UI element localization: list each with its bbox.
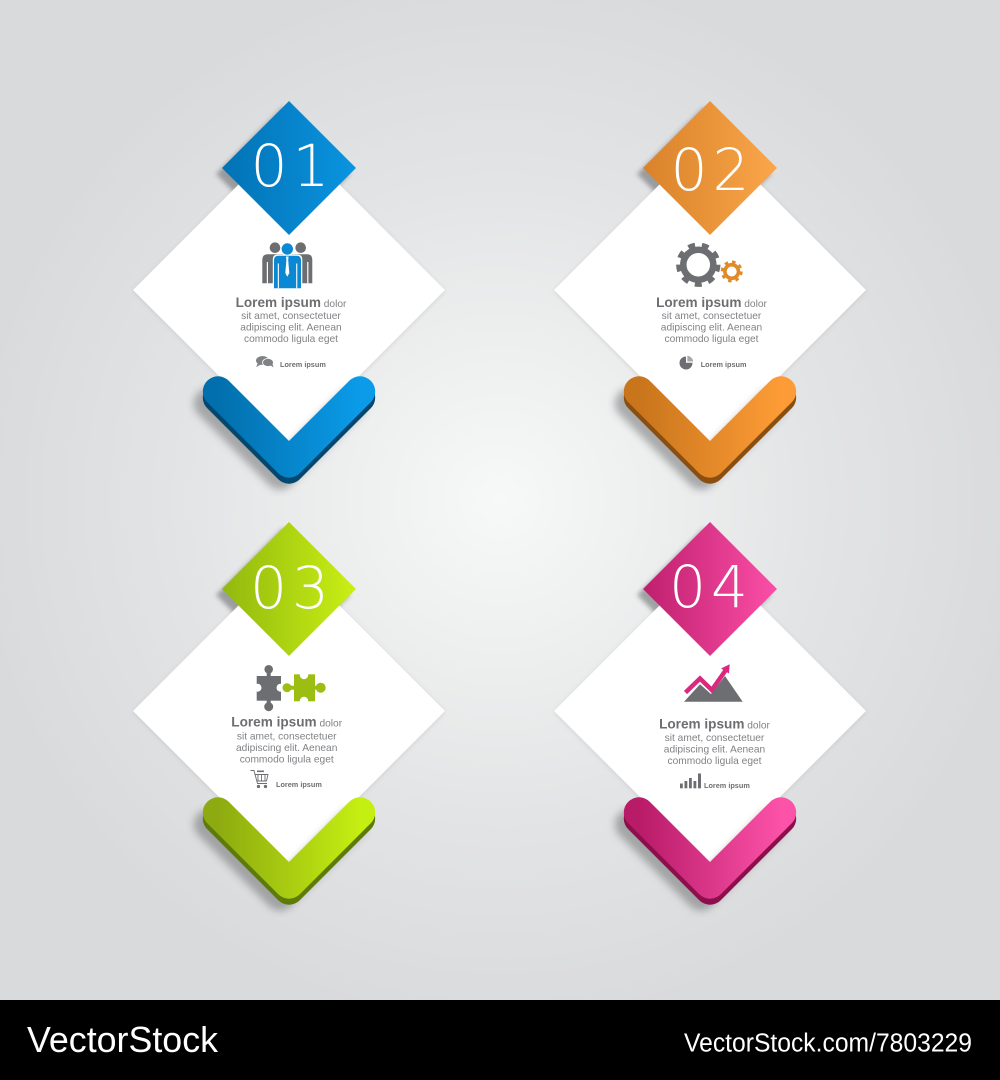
footer url text: VectorStock.com/7803229 xyxy=(684,1030,972,1058)
panel: card 03 xyxy=(133,522,445,896)
text block xyxy=(231,714,343,766)
white diamond xyxy=(133,555,445,867)
panel: card 04 xyxy=(554,522,866,896)
number badge 02 xyxy=(643,101,777,235)
text block xyxy=(656,295,768,345)
white diamond xyxy=(554,555,866,867)
arrow: chevron 01 xyxy=(209,392,360,474)
text block: Lorem ipsum dolor xyxy=(656,295,768,310)
text block: commodo ligula eget xyxy=(667,756,762,767)
number badge 02: 02 xyxy=(671,136,754,204)
icon: mountain with rising arrow xyxy=(684,664,743,702)
text block: sit amet, consectetuer xyxy=(237,732,337,742)
footer bar xyxy=(0,1000,1000,1080)
text block: commodo ligula eget xyxy=(664,334,759,345)
footer logo text: VectorStock xyxy=(27,1019,219,1060)
number badge 04 xyxy=(643,522,777,656)
number badge 03 xyxy=(222,522,356,656)
icon: bar chart xyxy=(680,774,701,788)
text block: adipiscing elit. Aenean xyxy=(236,743,337,754)
text block: adipiscing elit. Aenean xyxy=(664,744,765,756)
text block: sit amet, consectetuer xyxy=(665,733,765,744)
arrow: chevron 03 xyxy=(209,812,360,896)
label: Lorem ipsum xyxy=(280,360,326,369)
text block: Lorem ipsum dolor xyxy=(659,716,771,732)
icon: speech bubbles xyxy=(256,356,274,368)
text block: Lorem ipsum dolor xyxy=(231,714,343,730)
icon: puzzle pieces xyxy=(254,665,326,711)
white diamond xyxy=(133,134,445,446)
text block: commodo ligula eget xyxy=(240,754,334,766)
panel: card 01 xyxy=(133,101,445,474)
text block: sit amet, consectetuer xyxy=(662,311,762,322)
text block xyxy=(236,295,347,345)
arrow: chevron 04 xyxy=(630,812,781,896)
icon: shopping cart xyxy=(250,770,268,788)
text block: adipiscing elit. Aenean xyxy=(661,322,762,334)
white diamond xyxy=(554,134,866,446)
text block: Lorem ipsum dolor xyxy=(236,295,347,310)
number badge 01: 01 xyxy=(251,132,334,200)
text block xyxy=(659,716,771,767)
panel: card 02 xyxy=(554,101,866,474)
label: Lorem ipsum xyxy=(276,780,322,789)
arrow: chevron 02 xyxy=(630,392,781,474)
number badge 01 xyxy=(222,101,356,235)
text block: adipiscing elit. Aenean xyxy=(240,322,342,334)
number badge 04: 04 xyxy=(669,553,753,621)
icon: pie chart xyxy=(680,356,693,370)
text block: commodo ligula eget xyxy=(244,334,338,345)
text block: sit amet, consectetuer xyxy=(241,311,341,322)
icon: team of people xyxy=(262,242,312,288)
icon: gears xyxy=(678,245,741,285)
label: Lorem ipsum xyxy=(704,781,750,790)
label: Lorem ipsum xyxy=(701,360,747,369)
number badge 03: 03 xyxy=(250,554,334,622)
